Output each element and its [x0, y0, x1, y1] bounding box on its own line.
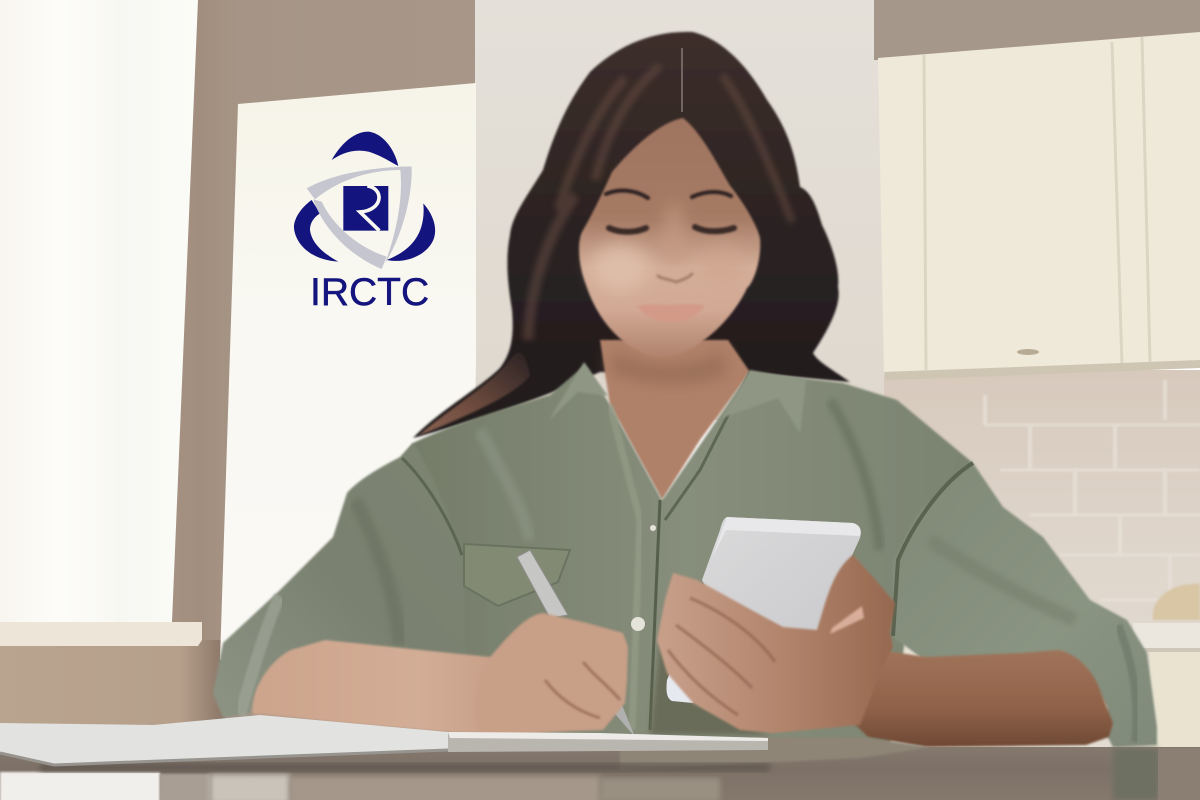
white cabinet panel behind logo	[220, 83, 476, 660]
logo: grey right blade	[385, 167, 412, 263]
background wall: upper right	[874, 0, 1200, 60]
shirt folds and placket	[240, 372, 1136, 742]
palm highlight	[830, 606, 864, 634]
hair: lighter strands	[528, 66, 792, 340]
counter and lower cabinet	[884, 584, 1200, 748]
notebook	[0, 715, 768, 765]
neck	[600, 340, 750, 500]
logo: navy left crescent	[294, 200, 338, 262]
logo: R letterform	[360, 186, 379, 231]
background wall: centre	[475, 0, 887, 420]
background wall: left	[0, 0, 480, 760]
logo: R square	[343, 186, 388, 231]
logo: navy top crescent	[332, 132, 398, 166]
lips	[637, 304, 705, 322]
hair: brown lower strands	[418, 353, 530, 436]
window sill	[0, 622, 202, 646]
shirt torso	[400, 365, 973, 745]
pen	[517, 550, 635, 737]
logo: navy right crescent	[387, 203, 435, 261]
logo: grey top blade	[307, 167, 412, 199]
logo: symbol	[294, 132, 435, 269]
finger shadows	[545, 598, 775, 718]
logo: wordmark: IRCTC	[310, 271, 429, 314]
collar	[549, 362, 806, 433]
right forearm	[830, 650, 1113, 747]
hair parting	[681, 48, 683, 112]
face	[579, 118, 760, 358]
logo: grey bottom blade	[313, 199, 387, 269]
hair	[413, 32, 850, 438]
left sleeve	[213, 443, 466, 718]
woman	[213, 32, 1157, 747]
phone	[667, 517, 861, 703]
neck shadow	[610, 350, 726, 383]
left forearm	[253, 640, 530, 735]
buttons	[631, 525, 656, 631]
eyebrows and eyes	[606, 191, 734, 282]
table	[0, 737, 1200, 800]
face highlights	[592, 205, 744, 292]
IRCTC logo	[294, 132, 435, 314]
pocket	[464, 544, 570, 606]
tiled backsplash	[884, 370, 1200, 750]
right sleeve	[893, 463, 1157, 747]
phone hand	[657, 555, 895, 733]
window	[0, 0, 198, 622]
writing hand	[475, 613, 628, 735]
kitchen cabinets	[878, 32, 1200, 380]
